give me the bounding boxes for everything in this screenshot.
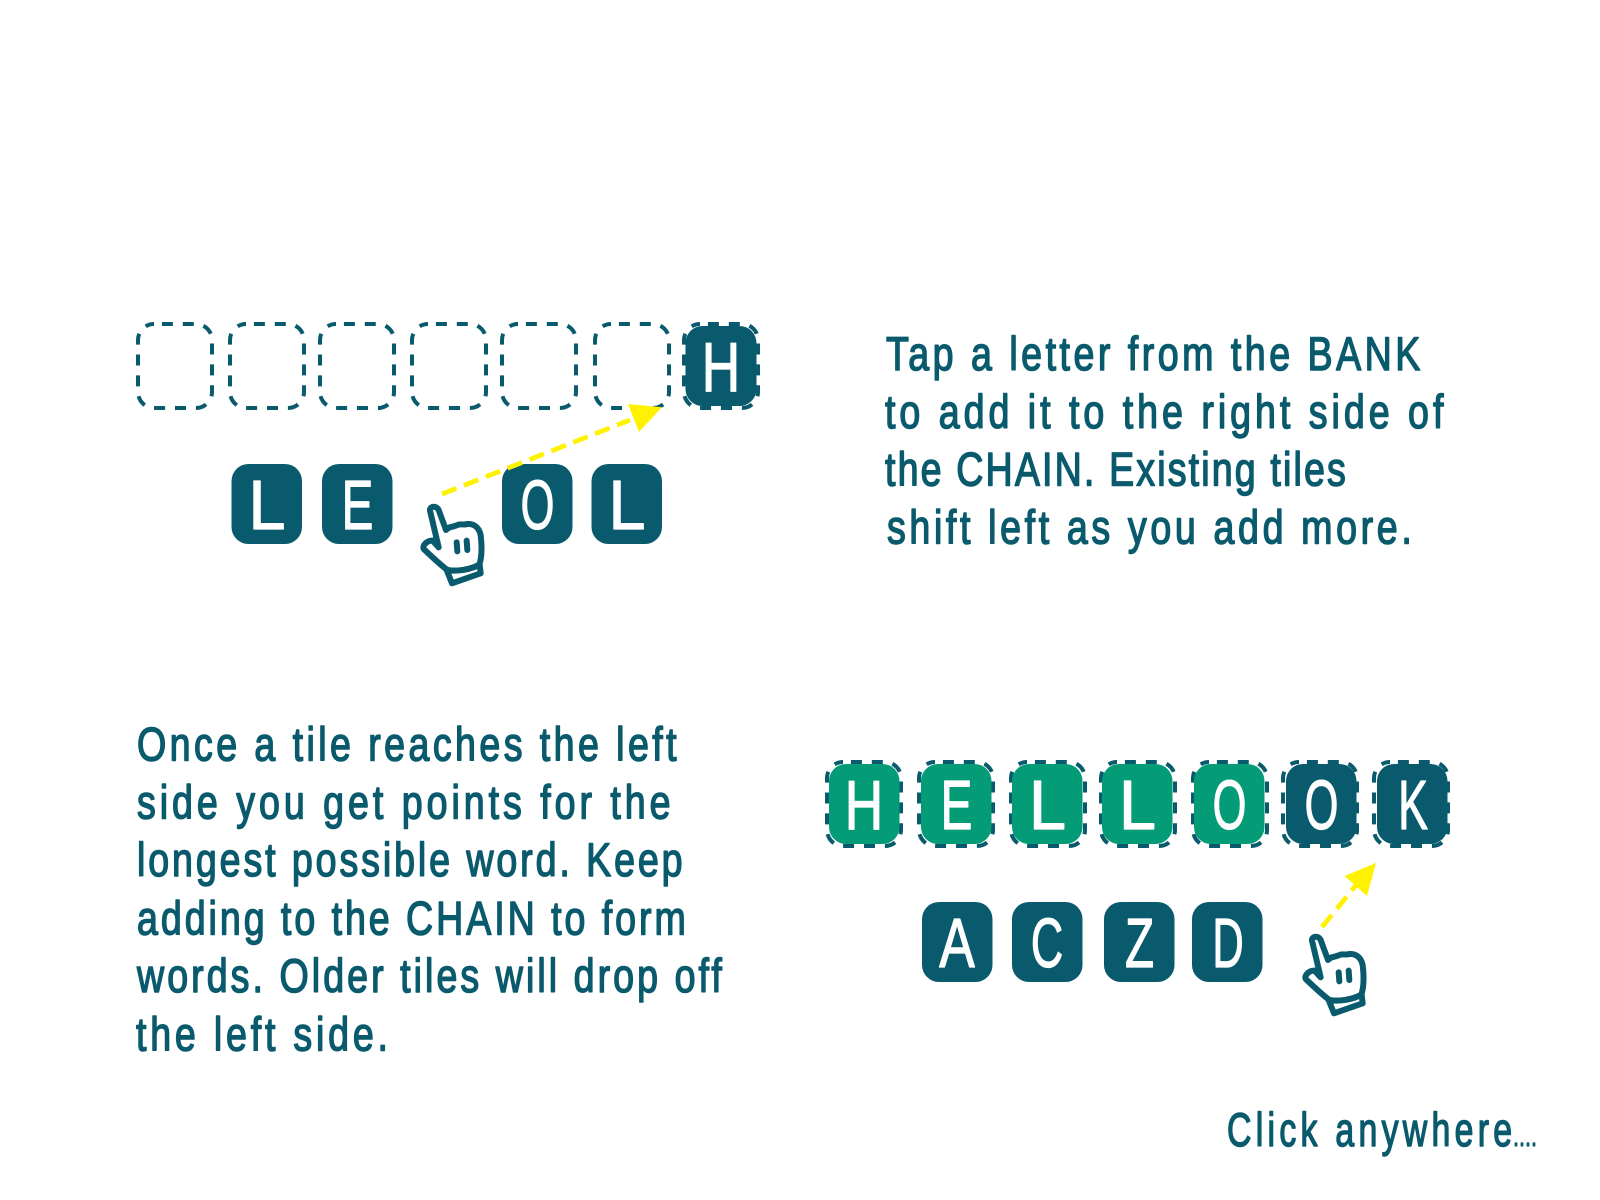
text block: tap instructions: the CHAIN. Existing tiles xyxy=(885,444,1346,497)
tile Z: Z xyxy=(1125,904,1154,982)
tile Z xyxy=(1104,902,1174,982)
tile A xyxy=(922,902,992,983)
tile E: E xyxy=(342,466,373,544)
text block: tap instructions: to add it to the right side of xyxy=(885,386,1444,439)
text: click anywhere prompt: .... xyxy=(1513,1118,1537,1153)
text block: tap instructions xyxy=(885,328,1444,555)
tile L xyxy=(592,464,662,544)
slot and tile E xyxy=(919,762,993,846)
text block: scoring instructions: side you get points for the xyxy=(137,777,671,830)
slot and tile K: K xyxy=(1398,767,1428,844)
panel: top chain of empty slots with H tile xyxy=(138,324,758,408)
empty slot 1 xyxy=(138,324,212,408)
tile C: C xyxy=(1031,905,1063,982)
slot and tile K xyxy=(1374,762,1448,846)
text block: scoring instructions: the left side. xyxy=(136,1009,388,1062)
text block: tap instructions: shift left as you add more. xyxy=(887,502,1412,555)
text block: scoring instructions: adding to the CHAIN to form xyxy=(137,893,686,946)
tile H xyxy=(686,326,756,407)
text block: tap instructions: Tap a letter from the BANK xyxy=(886,328,1420,381)
slot and tile L: L xyxy=(1029,766,1066,844)
slot and tile O xyxy=(1193,762,1267,846)
slot and tile E: E xyxy=(941,766,972,844)
tile C xyxy=(1012,902,1082,982)
empty slot 3 xyxy=(320,324,394,408)
slot and tile L: L xyxy=(1119,766,1156,844)
panel: top letter bank xyxy=(232,464,662,545)
text: click anywhere prompt: Click anywhere xyxy=(1227,1104,1512,1156)
tile A: A xyxy=(939,905,975,983)
text block: scoring instructions: Once a tile reaches the left xyxy=(137,719,677,772)
tile O: O xyxy=(521,466,554,545)
tile L: L xyxy=(249,466,285,544)
slot and tile O: O xyxy=(1305,766,1338,845)
slot and tile O xyxy=(1283,762,1357,846)
slot and tile L xyxy=(1011,762,1085,846)
slot and tile O: O xyxy=(1213,766,1246,845)
panel: bottom chain HELLOOK xyxy=(827,762,1448,846)
empty slot 6 xyxy=(595,324,669,408)
tile D xyxy=(1192,902,1262,983)
empty slot 7 xyxy=(684,324,758,408)
text block: scoring instructions xyxy=(136,719,722,1062)
tile D: D xyxy=(1212,904,1244,983)
tile O xyxy=(502,464,572,545)
icon: bottom pointing hand xyxy=(1305,937,1364,1013)
text block: scoring instructions: longest possible word. Keep xyxy=(137,834,683,887)
arrow: bottom yellow dashed arrow xyxy=(1322,863,1376,927)
empty slot 5 xyxy=(502,324,576,408)
tile L: L xyxy=(609,466,645,544)
slot and tile H xyxy=(827,762,901,846)
empty slot 2 xyxy=(230,324,304,408)
arrow: top yellow dashed arrow xyxy=(442,404,662,494)
tile H: H xyxy=(702,329,740,407)
empty slot 4 xyxy=(412,324,486,408)
slot and tile L xyxy=(1101,762,1175,846)
text block: scoring instructions: words. Older tiles will drop off xyxy=(136,950,722,1003)
slot and tile H: H xyxy=(845,767,883,845)
tile L xyxy=(232,464,302,544)
panel: bottom letter bank xyxy=(922,902,1262,983)
icon: top pointing hand xyxy=(423,507,482,583)
tile E xyxy=(322,464,392,544)
